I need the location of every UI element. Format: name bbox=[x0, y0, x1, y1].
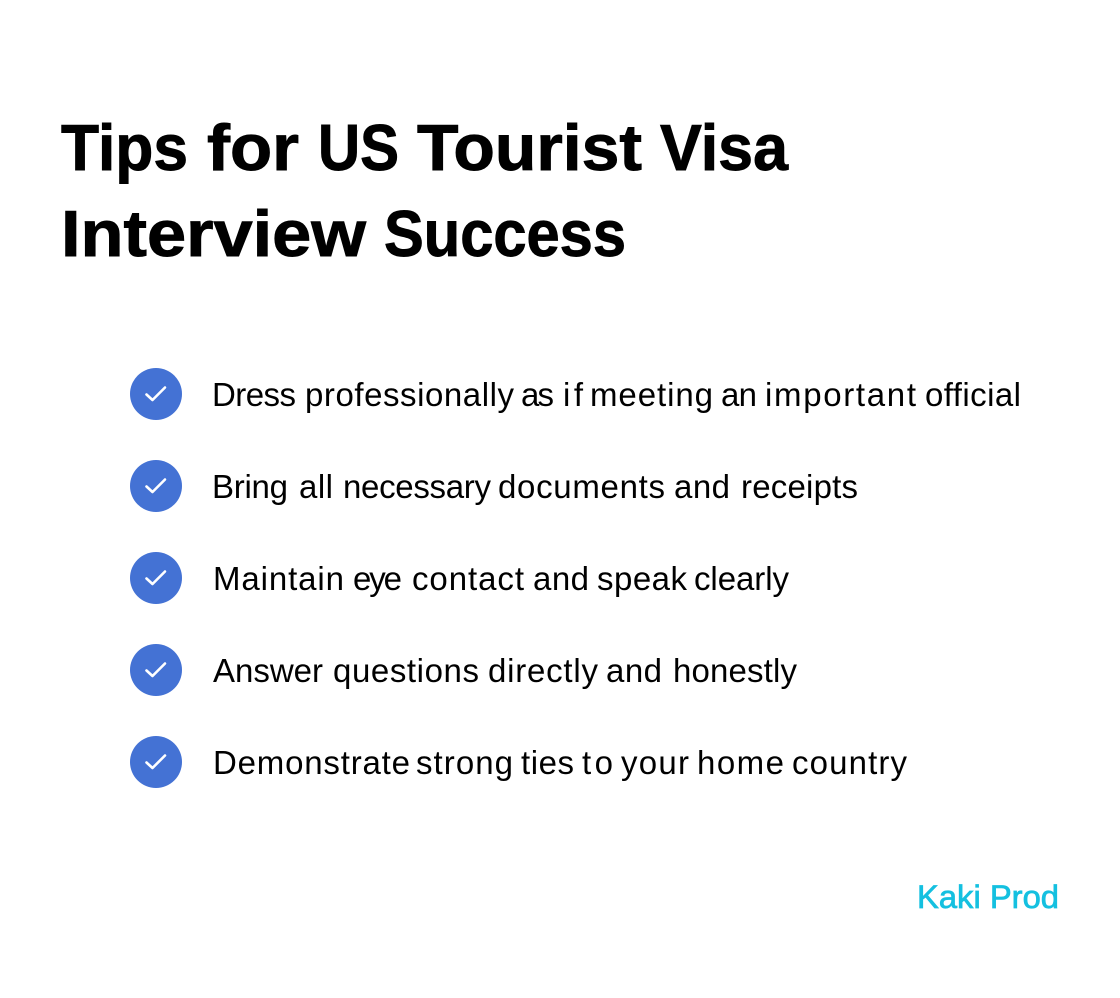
list item: strong ties bbox=[130, 736, 908, 788]
list item: bring documents bbox=[130, 460, 858, 512]
list item: dress professionally: important bbox=[765, 376, 916, 413]
list item: eye contact: clearly bbox=[694, 560, 790, 597]
title: Tips bbox=[61, 111, 188, 184]
list item: strong ties: Demonstrate bbox=[213, 744, 410, 781]
list item: eye contact: and bbox=[533, 560, 589, 597]
list item: strong ties: strong bbox=[416, 744, 513, 781]
list item: dress professionally: professionally bbox=[305, 376, 514, 413]
list item: strong ties: home bbox=[697, 744, 784, 781]
title: US bbox=[318, 111, 399, 184]
list item: answer questions: Answer bbox=[213, 652, 323, 689]
title: Interview bbox=[61, 197, 366, 270]
title bbox=[61, 111, 789, 270]
title: Success bbox=[384, 197, 626, 270]
list item: strong ties: ties bbox=[521, 744, 574, 781]
list item: answer questions: and bbox=[606, 652, 662, 689]
list item: eye contact: contact bbox=[412, 560, 524, 597]
checklist bbox=[130, 368, 1021, 788]
title: Tourist bbox=[417, 111, 642, 184]
list item: dress professionally: as bbox=[521, 376, 554, 413]
list item: eye contact: Maintain bbox=[213, 560, 344, 597]
list item: bring documents: necessary bbox=[343, 468, 492, 505]
list item: strong ties: your bbox=[621, 744, 689, 781]
title: for bbox=[207, 111, 299, 184]
list item: dress professionally: if bbox=[563, 376, 584, 413]
list item: strong ties: country bbox=[792, 744, 908, 781]
list item: strong ties: to bbox=[582, 744, 613, 781]
list item: eye contact: speak bbox=[597, 560, 688, 597]
list item: answer questions: directly bbox=[488, 652, 598, 689]
list item: bring documents: and bbox=[674, 468, 730, 505]
list item: eye contact: eye bbox=[353, 560, 402, 597]
list item: dress professionally bbox=[130, 368, 1021, 420]
list item: bring documents: all bbox=[299, 468, 333, 505]
list item: dress professionally: Dress bbox=[212, 376, 296, 413]
list item: bring documents: Bring bbox=[212, 468, 288, 505]
list item: eye contact bbox=[130, 552, 790, 604]
list item: answer questions bbox=[130, 644, 798, 696]
list item: bring documents: documents bbox=[498, 468, 665, 505]
list item: bring documents: receipts bbox=[741, 468, 858, 505]
list item: answer questions: questions bbox=[333, 652, 479, 689]
list item: dress professionally: meeting bbox=[590, 376, 713, 413]
list item: dress professionally: an bbox=[721, 376, 757, 413]
logo: Kaki Prod: Kaki Prod bbox=[917, 879, 1059, 915]
list item: answer questions: honestly bbox=[673, 652, 798, 689]
title: Visa bbox=[660, 111, 789, 184]
list item: dress professionally: official bbox=[925, 376, 1021, 413]
